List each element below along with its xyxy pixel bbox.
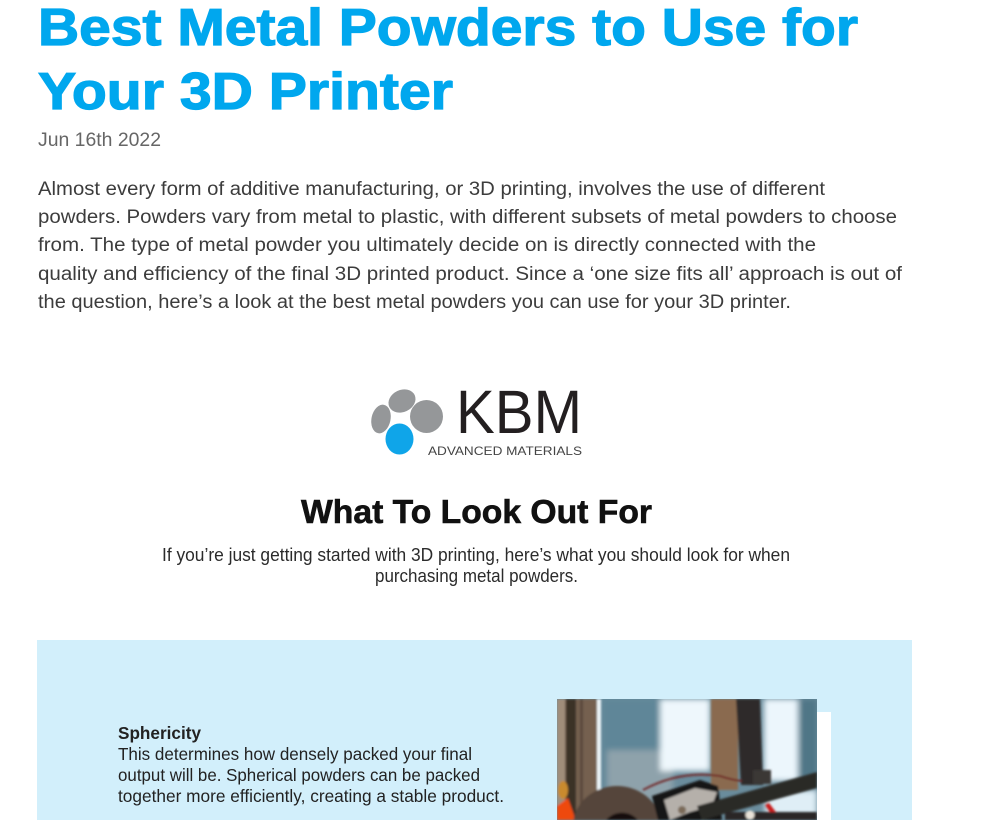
intro paragraph: quality and efficiency of the final 3D printed product. Since a ‘one size fits all’ approach is out of <box>38 264 903 285</box>
logo: KBM Advanced Materials <box>369 378 582 458</box>
sphericity text block: Sphericity <box>118 723 201 743</box>
heading: What To Look Out For <box>301 493 652 530</box>
logo tagline: ADVANCED MATERIALS <box>428 444 582 458</box>
sphericity text block: together more efficiently, creating a stable product. <box>118 786 504 806</box>
panel: sphericity <box>37 640 912 820</box>
icon: powder particles <box>369 385 443 454</box>
sphericity text block: output will be. Spherical powders can be packed <box>118 765 480 785</box>
photo backing <box>760 712 831 820</box>
intro paragraph: Almost every form of additive manufacturing, or 3D printing, involves the use of different <box>38 179 826 200</box>
subheading: purchasing metal powders. <box>375 566 578 586</box>
sphericity text block: This determines how densely packed your final <box>118 744 472 764</box>
intro paragraph: powders. Powders vary from metal to plastic, with different subsets of metal powders to choose <box>38 207 897 228</box>
intro paragraph <box>38 179 903 313</box>
sphericity text block <box>118 723 504 806</box>
title: Your 3D Printer <box>38 63 453 121</box>
title: Best Metal Powders to Use for <box>38 0 858 57</box>
intro paragraph: the question, here’s a look at the best metal powders you can use for your 3D printer. <box>38 292 791 313</box>
title <box>38 0 858 121</box>
subheading <box>162 545 790 586</box>
date: Jun 16th 2022 <box>38 130 161 151</box>
photo: 3D printer <box>557 699 817 820</box>
subheading: If you’re just getting started with 3D printing, here’s what you should look for when <box>162 545 790 565</box>
logo wordmark: KBM <box>456 378 582 446</box>
intro paragraph: from. The type of metal powder you ultimately decide on is directly connected with the <box>38 235 816 256</box>
